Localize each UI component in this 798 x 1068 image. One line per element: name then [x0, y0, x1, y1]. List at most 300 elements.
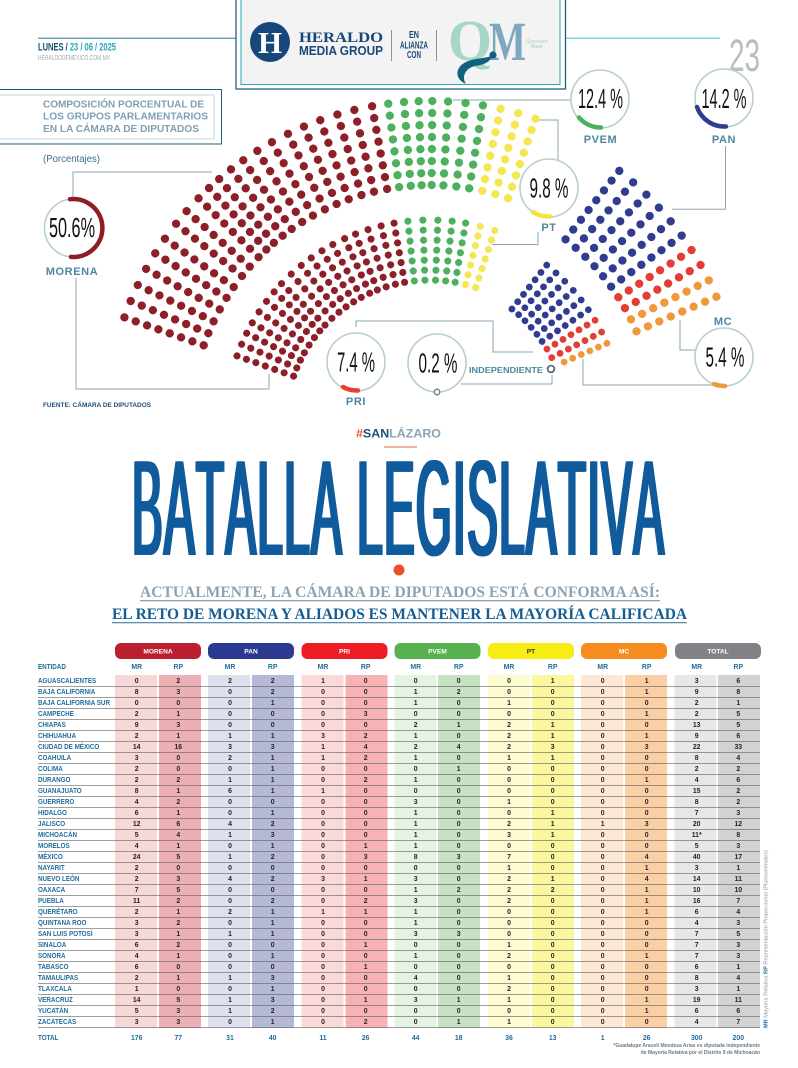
row: Baja California: 8	[135, 689, 139, 696]
row: Morelos: 1	[176, 843, 180, 850]
row: Jalisco: JALISCO	[38, 821, 65, 828]
gauge: PT 9.8%	[520, 159, 578, 234]
row: Durango: DURANGO	[38, 777, 70, 784]
row: Sinaloa: 0	[457, 942, 461, 949]
row: Puebla: 2	[176, 898, 180, 905]
row: Quintana Roo: QUINTANA ROO	[38, 920, 86, 927]
row: Yucatán: 0	[414, 1008, 418, 1015]
row: Chihuahua	[0, 731, 798, 742]
table totals row	[0, 1033, 798, 1044]
row: Guerrero: 0	[551, 799, 555, 806]
row: Tlaxcala: 0	[176, 986, 180, 993]
row: Coahuila: 0	[645, 755, 649, 762]
row: Tabasco: 0	[414, 964, 418, 971]
alliance label: EN	[409, 30, 419, 41]
row: Tamaulipas: 0	[601, 975, 605, 982]
row: Morelos: 4	[135, 843, 139, 850]
row: San Luis Potosí: SAN LUIS POTOSÍ	[38, 931, 93, 938]
gauge: PAN 14.2%: 14.2 %	[702, 83, 746, 114]
row: México: 4	[645, 854, 649, 861]
row: Baja California Sur: 0	[228, 700, 232, 707]
row: Puebla: 0	[551, 898, 555, 905]
row: Zacatecas: 0	[321, 1019, 325, 1026]
row: San Luis Potosí: 0	[645, 931, 649, 938]
row: Tlaxcala: 0	[321, 986, 325, 993]
row: Tabasco: 0	[321, 964, 325, 971]
row: Michoacán: 0	[457, 832, 461, 839]
row: Tabasco: 0	[457, 964, 461, 971]
seats: PT upper arc	[482, 109, 535, 200]
row: Sonora: 4	[135, 953, 139, 960]
row: Nayarit: 1	[736, 865, 740, 872]
party header pills	[115, 643, 761, 659]
row: Querétaro: 2	[228, 909, 232, 916]
website: HERALDODEMEXICO.COM.MX	[38, 53, 110, 62]
row: Campeche: CAMPECHE	[38, 711, 74, 718]
row: Sonora: 0	[321, 953, 325, 960]
row: Tabasco: 1	[736, 964, 740, 971]
row: Baja California: BAJA CALIFORNIA	[38, 689, 95, 696]
row: Colima: 0	[176, 766, 180, 773]
row: Tabasco: 6	[135, 964, 139, 971]
row: Baja California: 0	[507, 689, 511, 696]
row: Coahuila: 0	[176, 755, 180, 762]
row: Chiapas: 5	[736, 722, 740, 729]
row: Tabasco: TABASCO	[38, 964, 69, 971]
row: Baja California: 1	[645, 689, 649, 696]
row: Guanajuato: 0	[507, 788, 511, 795]
row: Jalisco: 12	[133, 821, 141, 828]
row: Baja California Sur: 0	[321, 700, 325, 707]
row: Puebla: 7	[736, 898, 740, 905]
row: Aguascalientes: 0	[364, 678, 368, 685]
row: Guerrero: 4	[135, 799, 139, 806]
row: Oaxaca	[0, 885, 798, 896]
row: Tamaulipas: 0	[321, 975, 325, 982]
row: Ciudad de México	[0, 742, 798, 753]
row: Colima: 0	[414, 766, 418, 773]
row: Ciudad de México: 1	[321, 744, 325, 751]
gauge: MC 5.4%: 5.4 %	[706, 342, 744, 372]
panel: chart title box: COMPOSICIÓN PORCENTUAL DE	[43, 98, 204, 110]
row: Sinaloa: 3	[736, 942, 740, 949]
row: Aguascalientes: 0	[135, 678, 139, 685]
pill: Morena: MORENA	[143, 648, 173, 655]
alliance label: ALIANZA	[400, 40, 428, 52]
row: Tlaxcala	[0, 984, 798, 995]
row: Querétaro: 6	[695, 909, 699, 916]
row: Chiapas: CHIAPAS	[38, 722, 66, 729]
table totals row: 40	[269, 1035, 277, 1042]
pill: Total: TOTAL	[707, 648, 729, 655]
row: Guanajuato: 0	[551, 788, 555, 795]
row: Zacatecas: 4	[695, 1019, 699, 1026]
row: Sinaloa	[0, 940, 798, 951]
row: Hidalgo: 1	[271, 810, 275, 817]
row: San Luis Potosí: 5	[736, 931, 740, 938]
row: Sonora: 0	[457, 953, 461, 960]
row: San Luis Potosí: 0	[507, 931, 511, 938]
row: Durango: 0	[321, 777, 325, 784]
row: Michoacán: 3	[507, 832, 511, 839]
seats: PAN upper block	[565, 171, 682, 287]
row: Tlaxcala: 1	[271, 986, 275, 993]
logo: Heraldo Media Group: MEDIA GROUP	[299, 43, 383, 58]
row: Oaxaca: 10	[734, 887, 742, 894]
row: Durango: 2	[176, 777, 180, 784]
row: México: 2	[271, 854, 275, 861]
row: Ciudad de México: 0	[601, 744, 605, 751]
gauge: PRI 7.4%: 7.4 %	[337, 346, 375, 378]
table column headers: RP	[174, 664, 183, 670]
row: Zacatecas: 3	[135, 1019, 139, 1026]
row: Baja California: 0	[228, 689, 232, 696]
row: Chiapas: 2	[507, 722, 511, 729]
row: Zacatecas: 0	[645, 1019, 649, 1026]
row: Baja California	[0, 687, 798, 698]
row: Jalisco: 2	[507, 821, 511, 828]
row: San Luis Potosí: 0	[551, 931, 555, 938]
row: Chiapas: 9	[135, 722, 139, 729]
table column headers: RP	[361, 664, 370, 670]
seats: PRI lower block	[546, 320, 602, 358]
row: Baja California Sur: 0	[551, 700, 555, 707]
row: Chiapas: 0	[321, 722, 325, 729]
table totals row: 77	[174, 1035, 182, 1042]
side legend: MR Mayoría Relativa RP Representación Proporcional (Plurinominales)	[764, 850, 770, 1028]
row: Guerrero: 1	[507, 799, 511, 806]
seats: MC lower block	[563, 343, 607, 363]
table totals row: 26	[362, 1035, 370, 1042]
row: Campeche: 3	[364, 711, 368, 718]
row: Sonora: 7	[695, 953, 699, 960]
table column headers: MR	[410, 664, 421, 670]
row: Michoacán: 0	[645, 832, 649, 839]
row: Yucatán: 0	[551, 1008, 555, 1015]
row: Chiapas	[0, 720, 798, 731]
table column bands	[115, 675, 760, 1028]
row: Aguascalientes: 0	[414, 678, 418, 685]
row: Tlaxcala: TLAXCALA	[38, 986, 72, 993]
row: San Luis Potosí: 1	[271, 931, 275, 938]
row: Aguascalientes: 6	[736, 678, 740, 685]
row: Ciudad de México: 3	[271, 744, 275, 751]
table column headers: MR	[131, 664, 142, 670]
row: Veracruz: VERACRUZ	[38, 997, 73, 1004]
row: Morelos: 0	[601, 843, 605, 850]
row: Tabasco	[0, 962, 798, 973]
row: Michoacán: 1	[414, 832, 418, 839]
row: Coahuila: 0	[601, 755, 605, 762]
row: Morelos: 0	[457, 843, 461, 850]
row: Oaxaca: 2	[507, 887, 511, 894]
row: Nayarit: 2	[135, 865, 139, 872]
row: Hidalgo: 0	[228, 810, 232, 817]
row: Chiapas: 1	[551, 722, 555, 729]
table column headers: MR	[691, 664, 702, 670]
footnote: de Mayoría Relativa por el Distrito 9 de Michoacán	[641, 1050, 760, 1056]
row: Campeche: 0	[457, 711, 461, 718]
row: Puebla: 16	[693, 898, 701, 905]
row: Veracruz: 0	[601, 997, 605, 1004]
row: Querétaro: 0	[457, 909, 461, 916]
row: Yucatán: 6	[736, 1008, 740, 1015]
row: Chiapas: 0	[364, 722, 368, 729]
row: Nayarit	[0, 863, 798, 874]
row: Yucatán: 0	[601, 1008, 605, 1015]
row: Yucatán: 1	[228, 1008, 232, 1015]
row: Durango: 1	[645, 777, 649, 784]
row: Chihuahua: 1	[645, 733, 649, 740]
row: Veracruz: 1	[364, 997, 368, 1004]
row: Nayarit: 3	[695, 865, 699, 872]
main title: BATALLA LEGISLATIVA	[132, 432, 665, 584]
row: Sonora: 2	[507, 953, 511, 960]
row: Quintana Roo: 1	[271, 920, 275, 927]
row: Baja California: 1	[414, 689, 418, 696]
row: Jalisco: 0	[321, 821, 325, 828]
row: Querétaro: 0	[551, 909, 555, 916]
subtitle line 2: EL RETO DE MORENA Y ALIADOS ES MANTENER LA MAYORÍA CALIFICADA	[112, 606, 688, 623]
row: Aguascalientes: 0	[601, 678, 605, 685]
row: Coahuila: 8	[695, 755, 699, 762]
row: Querétaro: 0	[507, 909, 511, 916]
table column headers: ENTIDAD	[38, 664, 66, 670]
row: Puebla: 1	[645, 898, 649, 905]
row: Durango: 0	[551, 777, 555, 784]
row: Chihuahua: 3	[321, 733, 325, 740]
gauge: PRI 7.4%: PRI	[346, 396, 366, 408]
row: Baja California: 0	[321, 689, 325, 696]
row: Guanajuato: GUANAJUATO	[38, 788, 82, 795]
alliance label: CON	[407, 50, 421, 61]
source note: FUENTE: CÁMARA DE DIPUTADOS	[43, 400, 152, 409]
row: Tamaulipas: 0	[551, 975, 555, 982]
row: Chiapas: 0	[645, 722, 649, 729]
row: Aguascalientes: 3	[695, 678, 699, 685]
row: Coahuila: 1	[551, 755, 555, 762]
row: Colima: 0	[601, 766, 605, 773]
row: Morelos: 0	[645, 843, 649, 850]
row: Coahuila: 1	[507, 755, 511, 762]
table totals row: TOTAL	[38, 1035, 58, 1042]
row: Tlaxcala: 0	[364, 986, 368, 993]
row: Nayarit: 0	[364, 865, 368, 872]
row: San Luis Potosí: 1	[228, 931, 232, 938]
row: Oaxaca: 0	[271, 887, 275, 894]
row: Baja California: 0	[364, 689, 368, 696]
row: Michoacán: 1	[228, 832, 232, 839]
table totals row: 300	[691, 1035, 702, 1042]
row: Jalisco: 1	[551, 821, 555, 828]
row: Campeche: 2	[695, 711, 699, 718]
row: Tlaxcala: 0	[551, 986, 555, 993]
row: Zacatecas: 0	[551, 1019, 555, 1026]
pill: PVEM	[394, 643, 480, 659]
logo: Question Mark: M	[489, 11, 526, 72]
row: Veracruz: 1	[457, 997, 461, 1004]
table column headers: RP	[454, 664, 463, 670]
row: Nayarit: 0	[321, 865, 325, 872]
row: Aguascalientes: 2	[228, 678, 232, 685]
row: Hidalgo: 0	[321, 810, 325, 817]
row: Puebla: 2	[507, 898, 511, 905]
row: Veracruz: 19	[693, 997, 701, 1004]
row: Chihuahua: 0	[601, 733, 605, 740]
row: Michoacán: 0	[364, 832, 368, 839]
row: Guanajuato: 1	[321, 788, 325, 795]
row: Guanajuato: 6	[228, 788, 232, 795]
row: Chihuahua: CHIHUAHUA	[38, 733, 76, 740]
row: Zacatecas: 0	[601, 1019, 605, 1026]
row: Oaxaca: 1	[645, 887, 649, 894]
row: Baja California Sur: 0	[457, 700, 461, 707]
seats: Morena upper arc	[124, 106, 387, 346]
row: Nuevo León: 1	[364, 876, 368, 883]
row: Chihuahua: 2	[364, 733, 368, 740]
row: Guanajuato: 0	[645, 788, 649, 795]
table column headers: MR	[597, 664, 608, 670]
row: Sinaloa: 6	[135, 942, 139, 949]
row: Sinaloa: SINALOA	[38, 942, 66, 949]
row: Tamaulipas: 8	[695, 975, 699, 982]
row: Morelos: 0	[551, 843, 555, 850]
row: Sonora	[0, 951, 798, 962]
row: Tamaulipas: 4	[736, 975, 740, 982]
header rule left	[38, 38, 236, 39]
row: Tabasco: 0	[645, 964, 649, 971]
row: Veracruz: 1	[645, 997, 649, 1004]
row: Colima: 0	[321, 766, 325, 773]
row: Baja California Sur: 0	[601, 700, 605, 707]
row: Jalisco: 20	[693, 821, 701, 828]
row: Puebla: 11	[133, 898, 140, 905]
table totals row: 200	[733, 1035, 744, 1042]
row: Campeche: 0	[321, 711, 325, 718]
row: Oaxaca: 2	[457, 887, 461, 894]
row: Tlaxcala: 0	[645, 986, 649, 993]
row: Baja California: 9	[695, 689, 699, 696]
row: México: 8	[414, 854, 418, 861]
row: Coahuila: 2	[364, 755, 368, 762]
row: Campeche: 0	[271, 711, 275, 718]
seats: MC upper block	[630, 280, 716, 332]
row: México: 5	[176, 854, 180, 861]
row: Baja California Sur: 0	[135, 700, 139, 707]
row: Campeche: 0	[551, 711, 555, 718]
header rule right	[566, 38, 720, 39]
row: Guerrero: 0	[601, 799, 605, 806]
row: Tamaulipas: 2	[135, 975, 139, 982]
row: Oaxaca: 5	[176, 887, 180, 894]
row: Durango: 4	[695, 777, 699, 784]
row: México: 17	[734, 854, 742, 861]
row: Ciudad de México: 3	[645, 744, 649, 751]
row: Aguascalientes: 1	[645, 678, 649, 685]
row: Chiapas: 13	[693, 722, 701, 729]
table totals row: 44	[412, 1035, 420, 1042]
row: Chihuahua: 1	[271, 733, 275, 740]
row: Chiapas: 2	[414, 722, 418, 729]
row: Zacatecas: 1	[507, 1019, 511, 1026]
row: Sonora: 0	[601, 953, 605, 960]
row: Yucatán: 5	[135, 1008, 139, 1015]
row: Yucatán: 0	[457, 1008, 461, 1015]
row: Campeche: 5	[736, 711, 740, 718]
logo: Question Mark	[448, 8, 548, 84]
row: Guanajuato: 0	[601, 788, 605, 795]
row: Sonora: 3	[736, 953, 740, 960]
row: Chihuahua: 6	[736, 733, 740, 740]
row: Yucatán	[0, 1006, 798, 1017]
row: Guerrero: 0	[645, 799, 649, 806]
row: Baja California: 2	[271, 689, 275, 696]
row: Quintana Roo: 3	[736, 920, 740, 927]
row: Tabasco: 0	[271, 964, 275, 971]
row: Quintana Roo	[0, 918, 798, 929]
row: Zacatecas: 2	[364, 1019, 368, 1026]
panel: chart title box: EN LA CÁMARA DE DIPUTADOS	[43, 122, 199, 135]
row: Yucatán: 0	[364, 1008, 368, 1015]
row: México: 40	[693, 854, 701, 861]
row: Guanajuato: 2	[736, 788, 740, 795]
row: Yucatán: 1	[645, 1008, 649, 1015]
table totals row: 1	[601, 1035, 605, 1042]
row: Guerrero: 0	[271, 799, 275, 806]
row: Guanajuato: 0	[414, 788, 418, 795]
row: México: 3	[457, 854, 461, 861]
row: Hidalgo: 1	[551, 810, 555, 817]
row: Durango: 0	[507, 777, 511, 784]
row: Colima	[0, 764, 798, 775]
row: Sinaloa: 0	[645, 942, 649, 949]
row: San Luis Potosí: 0	[601, 931, 605, 938]
row: Sinaloa: 0	[414, 942, 418, 949]
row: Ciudad de México: 2	[507, 744, 511, 751]
row: Yucatán: YUCATÁN	[38, 1008, 68, 1015]
row: Chihuahua: 2	[507, 733, 511, 740]
row: Baja California Sur: 0	[364, 700, 368, 707]
row: Morelos: 1	[414, 843, 418, 850]
row: Durango: 0	[601, 777, 605, 784]
row: Baja California Sur: 1	[271, 700, 275, 707]
row: Chiapas: 0	[228, 722, 232, 729]
row: Oaxaca: OAXACA	[38, 887, 65, 894]
seats: PVEM lower arc	[408, 220, 466, 284]
row: Tamaulipas: 0	[364, 975, 368, 982]
logo: Question Mark: Mark	[531, 44, 543, 50]
logo: Heraldo Media Group: H	[258, 25, 282, 60]
table totals row: 31	[226, 1035, 234, 1042]
row: Campeche: 1	[645, 711, 649, 718]
row: Jalisco: 4	[228, 821, 232, 828]
row: Yucatán: 3	[176, 1008, 180, 1015]
row: Baja California Sur	[0, 698, 798, 709]
gauge: Independiente 0.2%: 0.2 %	[418, 348, 458, 378]
row: Michoacán: 11*	[692, 832, 702, 839]
row: Coahuila: 0	[457, 755, 461, 762]
row: Sonora: 0	[228, 953, 232, 960]
gauge: PT 9.8%: PT	[541, 222, 557, 234]
row: Campeche: 0	[507, 711, 511, 718]
row: Colima: 2	[736, 766, 740, 773]
row: Nuevo León: 4	[228, 876, 232, 883]
seats: PVEM upper arc	[388, 101, 483, 190]
row: Guerrero	[0, 797, 798, 808]
gauge: PVEM 12.4%: PVEM	[584, 134, 617, 146]
row: Puebla: 2	[364, 898, 368, 905]
table column headers: MR	[318, 664, 328, 670]
